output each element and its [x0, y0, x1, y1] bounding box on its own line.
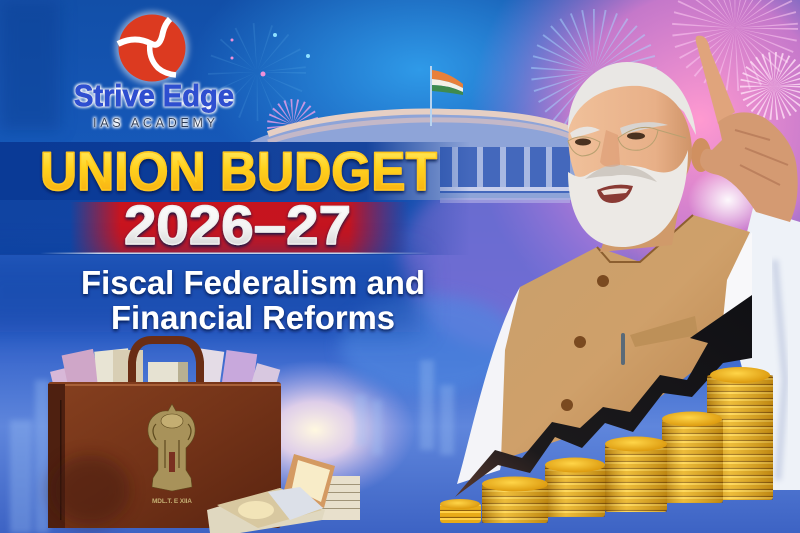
- parliament building: [250, 112, 580, 203]
- title: year: 2026–27: [124, 194, 351, 256]
- briefcase handle: [132, 340, 200, 382]
- Indian flag: [430, 66, 463, 126]
- person: vest: [501, 215, 750, 460]
- faint bar chart backdrop: [10, 360, 454, 533]
- vest details: [561, 215, 698, 411]
- gold coin stacks: [440, 367, 773, 523]
- fireworks: [230, 0, 791, 138]
- subtitle: Financial Reforms: [111, 299, 395, 336]
- emblem caption: MDL.T. E XIIA: [152, 498, 192, 505]
- logo wordmark: IAS ACADEMY: [93, 116, 216, 130]
- person: raised hand: [696, 36, 798, 222]
- title: Union Budget: UNION BUDGET: [40, 140, 437, 202]
- growth arrow: [455, 295, 752, 497]
- logo wordmark: Strive Edge: [74, 78, 234, 113]
- currency notes in briefcase: [50, 348, 280, 391]
- subtitle: [81, 264, 425, 336]
- subtitle: Fiscal Federalism and: [81, 264, 425, 301]
- red year band: [40, 202, 430, 254]
- logo mark: [115, 11, 189, 85]
- glow behind shoulder: [688, 166, 768, 234]
- cash bundles: [207, 454, 360, 533]
- logo wordmark: [74, 78, 234, 130]
- briefcase: [48, 382, 281, 528]
- subtitle background: [0, 254, 420, 332]
- national emblem: [148, 404, 195, 491]
- person: right arm and white kurta: [457, 208, 800, 490]
- person: head: [568, 62, 711, 252]
- title band: [0, 142, 470, 255]
